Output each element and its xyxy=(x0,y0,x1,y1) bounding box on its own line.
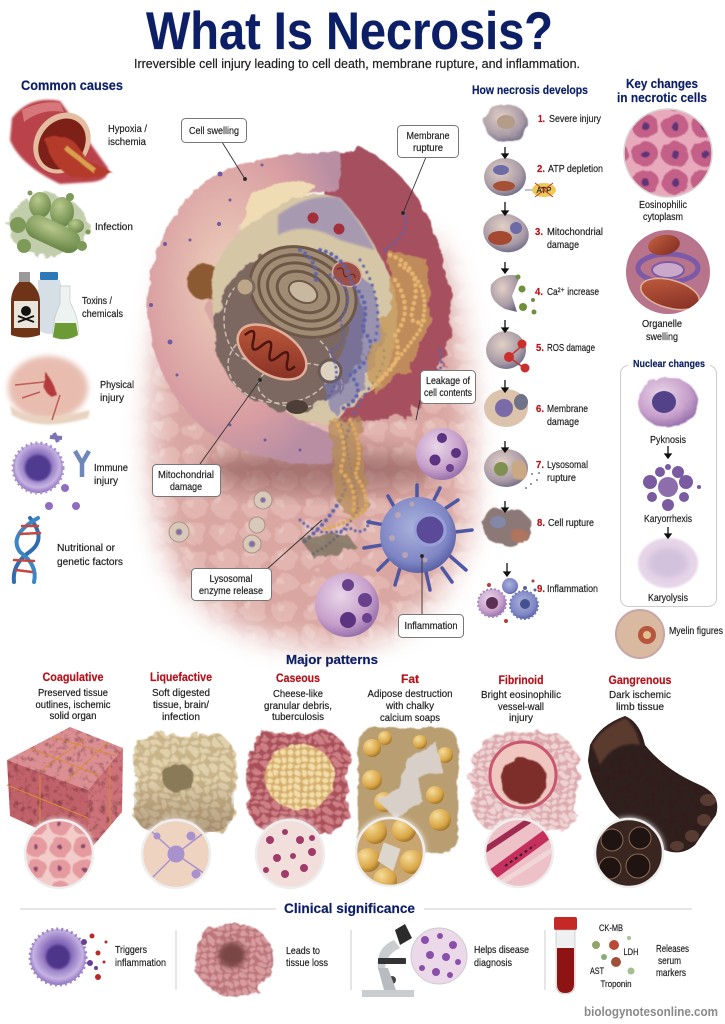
membrane spots xyxy=(149,164,302,452)
pattern: liquefactive: Soft digested xyxy=(152,687,210,699)
footer: source: biologynotesonline.com xyxy=(584,1005,718,1019)
circle: organelle swelling xyxy=(626,230,710,315)
step 9: inflammation: Inflammation xyxy=(547,583,598,595)
reticulum network xyxy=(224,280,342,407)
interior xyxy=(212,194,397,425)
icon: immune cell xyxy=(13,433,89,510)
callout: mitochondrial damage: damage xyxy=(170,481,202,493)
pattern: gangrenous: Dark ischemic xyxy=(609,689,671,701)
step 3: mitochondrial damage: Mitochondrial xyxy=(547,226,603,238)
step 7: lysosomal rupture: rupture xyxy=(547,472,576,484)
pattern: caseous: Caseous xyxy=(276,671,320,685)
pattern: coagulative: solid organ xyxy=(50,710,97,722)
step 5: ROS damage: ROS damage xyxy=(547,342,595,354)
pattern: coagulative xyxy=(7,670,123,893)
purple macrophage sphere xyxy=(315,573,379,637)
label: toxins: Toxins / xyxy=(82,295,112,307)
item: releases serum markers: CK-MB xyxy=(599,923,623,933)
panel: how necrosis develops xyxy=(472,83,603,623)
label: immune injury: Immune xyxy=(94,462,128,474)
callout: inflammation: Inflammation xyxy=(404,620,458,632)
pattern: fibrinoid: injury xyxy=(509,712,534,724)
pattern: caseous xyxy=(248,671,348,889)
label: eosinophilic cytoplasm: Eosinophilic xyxy=(639,199,687,211)
inflammatory blue cell xyxy=(364,485,472,590)
label: eosinophilic cytoplasm: cytoplasm xyxy=(643,211,683,223)
panel: common causes xyxy=(8,77,147,582)
label: hypoxia: ischemia xyxy=(108,136,146,148)
heading: clinical significance: Clinical significance xyxy=(284,900,415,916)
heading: how necrosis develops: How necrosis develops xyxy=(472,83,588,97)
purple sphere right xyxy=(416,428,468,480)
pattern: coagulative: Coagulative xyxy=(42,670,104,684)
step 6: membrane damage xyxy=(484,389,588,428)
step 3: mitochondrial damage: 3. xyxy=(535,226,543,238)
step 1: severe injury: 1. xyxy=(538,113,545,125)
torn membrane highlight xyxy=(240,182,315,235)
label: organelle swelling: swelling xyxy=(646,331,678,343)
panel: major patterns xyxy=(7,652,717,893)
step 4: calcium increase: 4. xyxy=(535,286,543,298)
callout: lysosomal enzyme release: enzyme release xyxy=(199,585,263,597)
icon: injured tissue xyxy=(8,356,90,424)
pattern: fat: calcium soaps xyxy=(380,712,440,724)
label: physical injury: Physical xyxy=(100,379,134,391)
callout: membrane rupture: Membrane xyxy=(406,130,450,142)
step 9: inflammation xyxy=(478,578,598,623)
step 7: lysosomal rupture: Lysosomal xyxy=(547,459,588,471)
pattern: liquefactive xyxy=(134,670,234,889)
pattern: fibrinoid xyxy=(472,673,578,890)
inner membrane lilac xyxy=(278,197,375,250)
label: physical injury xyxy=(100,379,134,404)
item: releases serum markers: LDH xyxy=(624,947,638,957)
callout: leakage of cell contents xyxy=(420,370,476,404)
pattern: fibrinoid: Fibrinoid xyxy=(498,673,544,687)
crater rim, back of cell xyxy=(320,146,450,420)
vacuoles xyxy=(236,278,341,414)
pattern: liquefactive: tissue, brain/ xyxy=(153,699,209,711)
callout: lysosomal enzyme release: Lysosomal xyxy=(210,573,252,585)
step 2: ATP depletion: ATP xyxy=(536,186,552,195)
item: leads to tissue loss: Leads to xyxy=(286,945,320,957)
leader lines xyxy=(200,142,426,614)
small mitochondrion xyxy=(328,257,366,291)
item: triggers inflammation: inflammation xyxy=(115,957,166,969)
heading: key changes: in necrotic cells xyxy=(617,90,707,105)
heading: key changes xyxy=(617,76,707,105)
step 2: ATP depletion: ATP depletion xyxy=(548,163,603,175)
debris stream xyxy=(300,416,368,560)
tissue bed xyxy=(130,223,489,665)
pattern: coagulative: Preserved tissue xyxy=(38,687,108,699)
arrows between steps xyxy=(502,147,510,576)
blue haze beside golgi xyxy=(322,255,385,415)
pattern: caseous: tuberculosis xyxy=(272,711,324,723)
callout: leakage of cell contents: Leakage of xyxy=(426,375,470,387)
step 1: severe injury xyxy=(484,104,602,142)
label: immune injury: injury xyxy=(94,475,119,487)
step 7: lysosomal rupture xyxy=(484,449,588,489)
label: toxins xyxy=(82,295,123,320)
heading: nuclear changes: Nuclear changes xyxy=(633,358,705,370)
step 6: membrane damage: 6. xyxy=(536,403,544,415)
cell body xyxy=(147,152,345,464)
step 9: inflammation: 9. xyxy=(537,583,545,595)
pattern: gangrenous xyxy=(588,673,717,888)
label: organelle swelling: Organelle xyxy=(642,318,682,330)
pattern: gangrenous: limb tissue xyxy=(616,701,664,713)
label: hypoxia xyxy=(108,123,147,148)
item: helps disease diagnosis xyxy=(362,924,529,997)
item: triggers inflammation xyxy=(30,929,166,985)
item: leads to tissue loss: tissue loss xyxy=(286,957,328,969)
item: releases serum markers: serum xyxy=(658,955,681,967)
pattern: fat: with chalky xyxy=(385,700,435,712)
step 6: membrane damage: Membrane xyxy=(547,403,588,415)
icon: blocked artery xyxy=(10,100,112,185)
cell tear hole xyxy=(187,264,223,300)
callout: membrane rupture xyxy=(398,126,458,158)
pattern: fat: Adipose destruction xyxy=(368,688,453,700)
callout: cell swelling: Cell swelling xyxy=(189,125,239,137)
small vesicles xyxy=(169,491,272,553)
label: immune injury xyxy=(94,462,128,487)
label: eosinophilic cytoplasm xyxy=(639,199,687,223)
pyknosis: Pyknosis xyxy=(650,434,686,446)
pattern: liquefactive: infection xyxy=(162,711,200,723)
myelin figures xyxy=(616,610,723,658)
step 7: lysosomal rupture: 7. xyxy=(536,459,544,471)
step 4: calcium increase: Ca²⁺ increase xyxy=(547,286,599,298)
step 6: membrane damage: damage xyxy=(547,416,579,428)
callout: leakage of cell contents: cell contents xyxy=(424,387,472,399)
subtitle: Irreversible cell injury leading to cell death, membrane rupture, and inflammation. xyxy=(134,57,580,71)
pattern: fibrinoid: vessel-wall xyxy=(498,701,544,713)
pattern: fat xyxy=(355,672,458,892)
pyknosis xyxy=(638,377,698,446)
pattern: liquefactive: Liquefactive xyxy=(150,670,212,684)
pattern: fibrinoid: Bright eosinophilic xyxy=(481,689,561,701)
step 8: cell rupture: Cell rupture xyxy=(548,517,594,529)
step 2: ATP depletion: 2. xyxy=(537,163,545,175)
karyorrhexis xyxy=(643,464,701,525)
pattern: caseous: Cheese-like xyxy=(273,688,323,700)
large mitochondrion xyxy=(228,313,316,391)
panel: clinical significance xyxy=(20,900,692,997)
heading: common causes: Common causes xyxy=(21,77,123,93)
step 2: ATP depletion xyxy=(484,158,603,197)
step 3: mitochondrial damage: damage xyxy=(547,239,579,251)
callout: lysosomal enzyme release xyxy=(192,568,272,600)
label: hypoxia: Hypoxia / xyxy=(108,123,147,135)
golgi stack xyxy=(235,230,371,354)
label: organelle swelling xyxy=(642,318,682,343)
central illustration: necrotic cell xyxy=(130,118,489,665)
karyorrhexis: Karyorrhexis xyxy=(644,513,692,525)
step 4: calcium increase xyxy=(491,274,599,314)
item: leads to tissue loss xyxy=(194,923,328,995)
pattern: coagulative: outlines, ischemic xyxy=(36,699,110,711)
item: releases serum markers: AST xyxy=(590,966,604,976)
icon: toxin bottles xyxy=(11,272,78,339)
leaked yellow debris xyxy=(365,250,430,395)
step 1: severe injury: Severe injury xyxy=(549,113,602,125)
step 8: cell rupture xyxy=(482,509,594,545)
callout: cell swelling xyxy=(182,118,246,142)
callout: membrane rupture: rupture xyxy=(413,142,443,154)
item: releases serum markers: Troponin xyxy=(600,979,632,989)
step 8: cell rupture: 8. xyxy=(537,517,545,529)
organelle mass xyxy=(214,250,366,410)
label: nutritional or genetic xyxy=(57,542,123,568)
item: releases serum markers: Releases xyxy=(656,943,689,955)
item: releases serum markers: markers xyxy=(656,967,686,979)
pattern: gangrenous: Gangrenous xyxy=(608,673,672,687)
icon: bacteria xyxy=(8,190,90,257)
callout: mitochondrial damage xyxy=(152,464,220,496)
item: helps disease diagnosis: diagnosis xyxy=(474,957,512,969)
label: physical injury: injury xyxy=(100,392,125,404)
panel: key changes in necrotic cells xyxy=(615,76,723,658)
item: helps disease diagnosis: Helps disease xyxy=(474,944,529,956)
step 5: ROS damage xyxy=(486,331,595,372)
leaked blue debris xyxy=(300,215,441,555)
callout: mitochondrial damage: Mitochondrial xyxy=(158,469,214,481)
callout: inflammation xyxy=(398,614,464,638)
icon: DNA helix xyxy=(14,518,40,582)
label: infection: Infection xyxy=(95,221,133,233)
arrows xyxy=(665,446,671,538)
karyolysis: Karyolysis xyxy=(648,592,688,604)
step 5: ROS damage: 5. xyxy=(536,342,544,354)
karyolysis xyxy=(638,538,698,604)
label: nutritional or genetic: genetic factors xyxy=(57,556,123,568)
item: triggers inflammation: Triggers xyxy=(115,944,147,956)
heading: major patterns: Major patterns xyxy=(286,652,378,667)
title: What Is Necrosis? xyxy=(146,2,553,61)
step 3: mitochondrial damage xyxy=(479,209,603,257)
pattern: caseous: granular debris, xyxy=(264,700,332,712)
label: nutritional or genetic: Nutritional or xyxy=(57,542,115,554)
label: toxins: chemicals xyxy=(82,308,123,320)
circle: eosinophilic cytoplasm xyxy=(623,108,713,198)
dark shadow beneath cell xyxy=(200,448,440,492)
pattern: fat: Fat xyxy=(401,672,419,686)
heading: key changes: Key changes xyxy=(626,76,698,91)
item: releases serum markers xyxy=(554,917,689,994)
box: nuclear changes xyxy=(620,358,716,606)
